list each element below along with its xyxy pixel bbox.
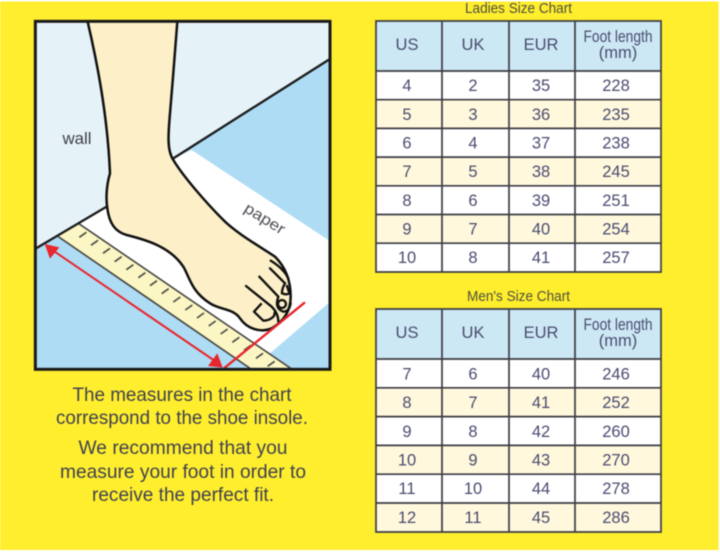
instructions text: measure your foot in order to	[60, 461, 306, 483]
red measuring line at toe	[224, 302, 305, 368]
men's data rows: 12	[398, 509, 416, 527]
men's data rows: 11	[398, 480, 416, 498]
ladies data rows: 5	[468, 163, 478, 181]
panel: foot measuring illustration	[35, 21, 330, 369]
men's data rows: 42	[532, 423, 550, 441]
men's header row: EUR	[524, 324, 558, 342]
ladies data rows: 245	[602, 163, 630, 181]
men's header row: (mm)	[599, 332, 637, 350]
table: Men's size chart	[376, 309, 661, 532]
men's data rows: 252	[602, 394, 630, 412]
ladies data rows: 36	[532, 106, 550, 124]
ladies header row: EUR	[524, 36, 558, 54]
ladies data rows: 8	[468, 249, 478, 267]
ladies data rows: 39	[532, 192, 550, 210]
foot	[88, 22, 291, 330]
ladies header row: (mm)	[599, 44, 637, 62]
ladies data rows: 254	[602, 220, 630, 238]
red double arrow	[45, 244, 223, 368]
ladies data rows: 6	[468, 192, 478, 210]
men's data rows	[398, 366, 630, 527]
label: wall: wall	[61, 130, 92, 148]
title: Men's Size Chart: Men's Size Chart	[467, 289, 570, 305]
ladies data rows: 3	[468, 106, 478, 124]
table: Ladies size chart	[376, 21, 661, 272]
wall background	[35, 21, 330, 369]
men's data rows: 8	[468, 423, 478, 441]
ladies data rows: 228	[602, 77, 630, 95]
men's header row: US	[396, 324, 418, 342]
men's data rows: 41	[532, 394, 550, 412]
men's data rows: 9	[468, 452, 478, 470]
men's data rows: 45	[532, 509, 550, 527]
ruler	[58, 223, 291, 368]
men's data rows: 8	[402, 394, 412, 412]
ladies data rows: 238	[602, 134, 630, 152]
ladies header row	[396, 28, 652, 62]
instructions text: receive the perfect fit.	[92, 484, 274, 506]
men's data rows: 44	[532, 480, 550, 498]
instructions text: The measures in the chart	[72, 384, 292, 406]
men's header row: UK	[462, 324, 484, 342]
ladies data rows: 257	[602, 249, 630, 267]
frame	[35, 21, 330, 369]
men's data rows: 270	[602, 452, 630, 470]
ladies data rows: 8	[402, 192, 412, 210]
instructions text: We recommend that you	[78, 437, 288, 459]
ladies data rows: 2	[468, 77, 478, 95]
men's data rows: 11	[464, 509, 482, 527]
men's data rows: 286	[602, 509, 630, 527]
men's data rows: 7	[468, 394, 478, 412]
title: Ladies Size Chart: Ladies Size Chart	[465, 1, 572, 17]
ladies data rows: 4	[402, 77, 412, 95]
wall floor line	[36, 59, 329, 248]
men's header row: Foot length	[584, 316, 652, 334]
label: paper: paper	[241, 200, 288, 238]
paper sheet	[78, 150, 328, 353]
men's data rows: 246	[602, 366, 630, 384]
instructions text: correspond to the shoe insole.	[56, 407, 308, 429]
ladies data rows: 5	[402, 106, 412, 124]
ladies header row: US	[396, 36, 418, 54]
floor	[36, 59, 329, 369]
men's data rows: 9	[402, 423, 412, 441]
ladies data rows: 40	[532, 220, 550, 238]
ladies data rows: 251	[602, 192, 630, 210]
ladies data rows: 41	[532, 249, 550, 267]
men's data rows: 278	[602, 480, 630, 498]
ladies data rows: 9	[402, 220, 412, 238]
men's data rows: 6	[468, 366, 478, 384]
ladies header row: Foot length	[584, 28, 652, 46]
ladies data rows: 235	[602, 106, 630, 124]
ladies data rows: 7	[402, 163, 412, 181]
men's data rows: 7	[402, 366, 412, 384]
ladies data rows: 35	[532, 77, 550, 95]
ladies data rows: 6	[402, 134, 412, 152]
men's data rows: 43	[532, 452, 550, 470]
ladies data rows	[398, 77, 630, 267]
ladies data rows: 4	[468, 134, 478, 152]
men's header row	[396, 316, 652, 350]
men's data rows: 10	[398, 452, 416, 470]
men's data rows: 40	[532, 366, 550, 384]
men's data rows: 10	[464, 480, 482, 498]
ladies data rows: 7	[468, 220, 478, 238]
instructions text	[56, 384, 308, 506]
men's data rows: 260	[602, 423, 630, 441]
ladies data rows: 10	[398, 249, 416, 267]
ladies data rows: 37	[532, 134, 550, 152]
ladies data rows: 38	[532, 163, 550, 181]
ladies header row: UK	[462, 36, 484, 54]
